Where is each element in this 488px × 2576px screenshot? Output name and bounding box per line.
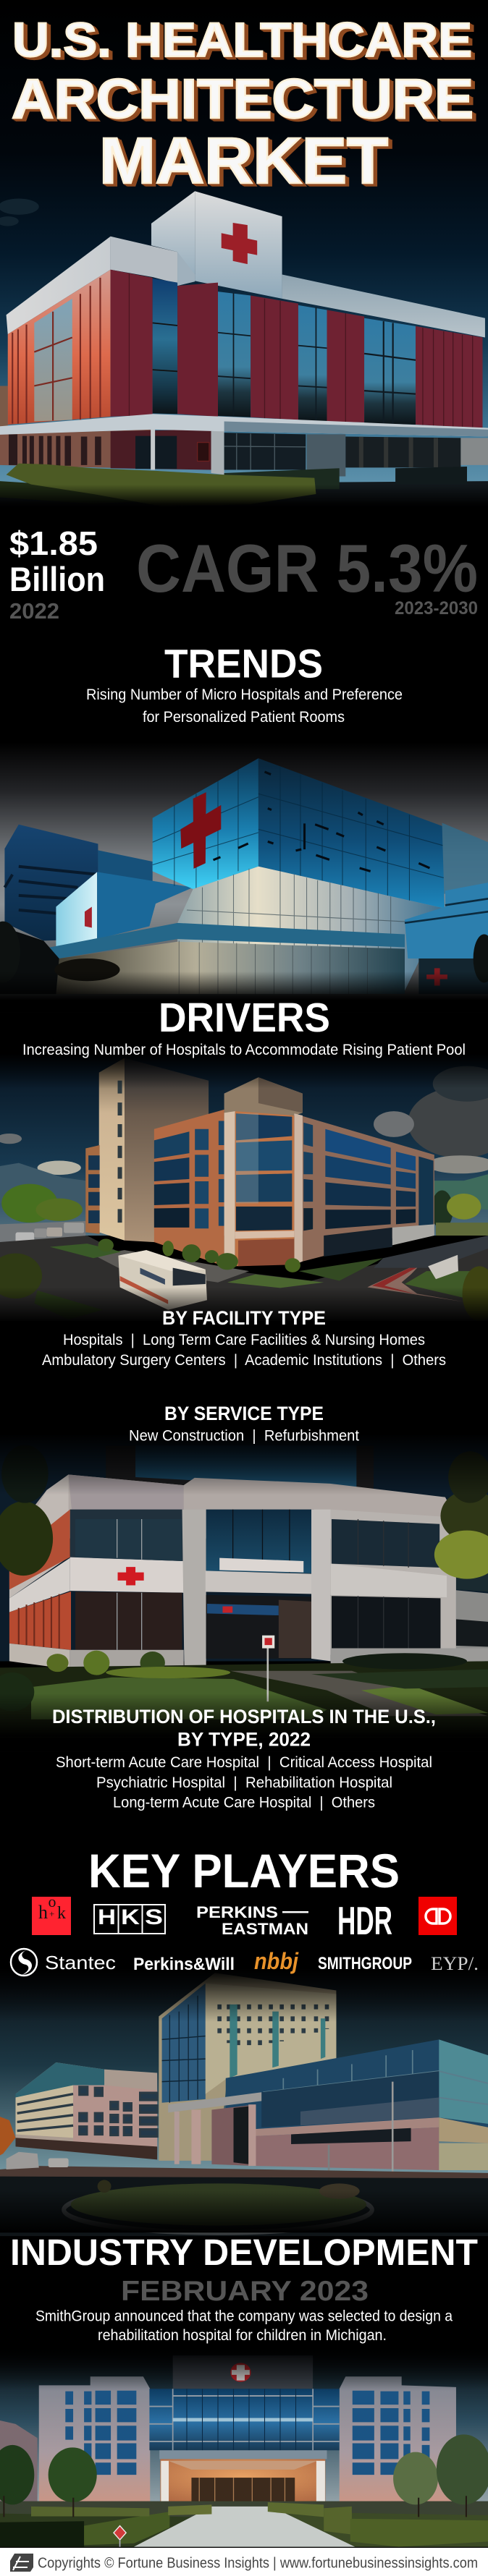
footer logo — [10, 2554, 33, 2572]
hero illustration: hospital building — [0, 0, 488, 506]
service heading: BY SERVICE TYPE — [164, 1403, 324, 1424]
illustration: hospital campus with roundabout — [0, 1969, 488, 2236]
distribution heading line 1: DISTRIBUTION OF HOSPITALS IN THE U.S., — [52, 1706, 436, 1727]
service list: New Construction | Refurbishment — [129, 1428, 359, 1444]
development body line 2: rehabilitation hospital for children in Michigan. — [98, 2327, 387, 2344]
value: $1.85 — [9, 524, 98, 562]
industry development heading: INDUSTRY DEVELOPMENT — [10, 2232, 478, 2273]
logo: HKS: H — [98, 1905, 116, 1929]
title line 1: U.S. HEALTHCARE — [12, 13, 472, 67]
logo: Perkins&Will: Perkins&Will — [133, 1955, 235, 1974]
stat: CAGR — [136, 530, 478, 619]
distribution list line 3: Long-term Acute Care Hospital | Others — [113, 1794, 375, 1811]
logo: Stantec — [11, 1949, 116, 1976]
distribution list line 1: Short-term Acute Care Hospital | Critical Access Hospital — [56, 1754, 432, 1771]
trends body line 2: for Personalized Patient Rooms — [143, 709, 345, 726]
development body line 1: SmithGroup announced that the company was selected to design a — [35, 2308, 453, 2325]
logo: Perkins Eastman — [196, 1903, 308, 1938]
title — [12, 13, 474, 197]
facility list line 1: Hospitals | Long Term Care Facilities & Nursing Homes — [63, 1332, 425, 1348]
section: distribution of hospitals — [52, 1706, 436, 1811]
logo: HOK: h — [38, 1902, 48, 1923]
section: by facility type — [42, 1307, 446, 1369]
illustration: glass hospital — [0, 742, 488, 1013]
footer bar — [0, 2548, 488, 2576]
logo: Perkins Eastman: EASTMAN — [222, 1920, 308, 1938]
logo: HKS: K — [121, 1905, 140, 1929]
stat: market size 2022 — [9, 524, 105, 624]
logo: NBBJ: nbbj — [254, 1948, 299, 1974]
section: by service type — [129, 1403, 359, 1444]
distribution heading line 2: BY TYPE, 2022 — [177, 1729, 311, 1751]
logo: SmithGroup: SMITHGROUP — [318, 1954, 412, 1973]
logo: Perkins Eastman: PERKINS — [196, 1903, 278, 1921]
ground fade under hero — [0, 499, 488, 524]
trends body line 1: Rising Number of Micro Hospitals and Preference — [86, 686, 403, 703]
drivers heading: DRIVERS — [159, 995, 330, 1041]
logo: HKS: S — [145, 1905, 163, 1929]
logo: HOK: + — [49, 1908, 54, 1919]
development date: FEBRUARY 2023 — [121, 2276, 369, 2307]
distribution list line 2: Psychiatric Hospital | Rehabilitation Hospital — [96, 1774, 392, 1791]
title line 2: ARCHITECTURE — [12, 68, 474, 130]
illustration: hospital entrance — [0, 1434, 488, 1751]
logo: HDR: HDR — [337, 1898, 392, 1943]
logo: HOK: k — [57, 1904, 66, 1923]
logo: Stantec: Stantec — [45, 1952, 116, 1973]
year: 2022 — [9, 598, 59, 624]
facility list line 2: Ambulatory Surgery Centers | Academic Institutions | Others — [42, 1352, 446, 1369]
title line 3: MARKET — [99, 125, 388, 197]
logo: HOK: o — [48, 1892, 56, 1910]
logo: HKS — [94, 1905, 165, 1934]
section: drivers text — [22, 995, 466, 1058]
drivers body: Increasing Number of Hospitals to Accommodate Rising Patient Pool — [22, 1042, 466, 1058]
trends heading: TRENDS — [164, 641, 323, 686]
key players heading: KEY PLAYERS — [88, 1844, 400, 1897]
logo: CannonDesign mark — [418, 1897, 457, 1935]
unit: Billion — [9, 560, 105, 598]
illustration: large hospital front — [0, 2348, 488, 2547]
logo: HOK — [32, 1892, 71, 1935]
illustration: mid-rise hospital — [0, 1053, 488, 1338]
section: key players — [11, 1844, 479, 1976]
section: trends text — [86, 641, 403, 726]
section: industry development — [10, 2232, 478, 2344]
logo: EYP: EYP/. — [431, 1953, 479, 1974]
CAGR period: 2023-2030 — [395, 598, 478, 619]
facility heading: BY FACILITY TYPE — [162, 1307, 326, 1329]
